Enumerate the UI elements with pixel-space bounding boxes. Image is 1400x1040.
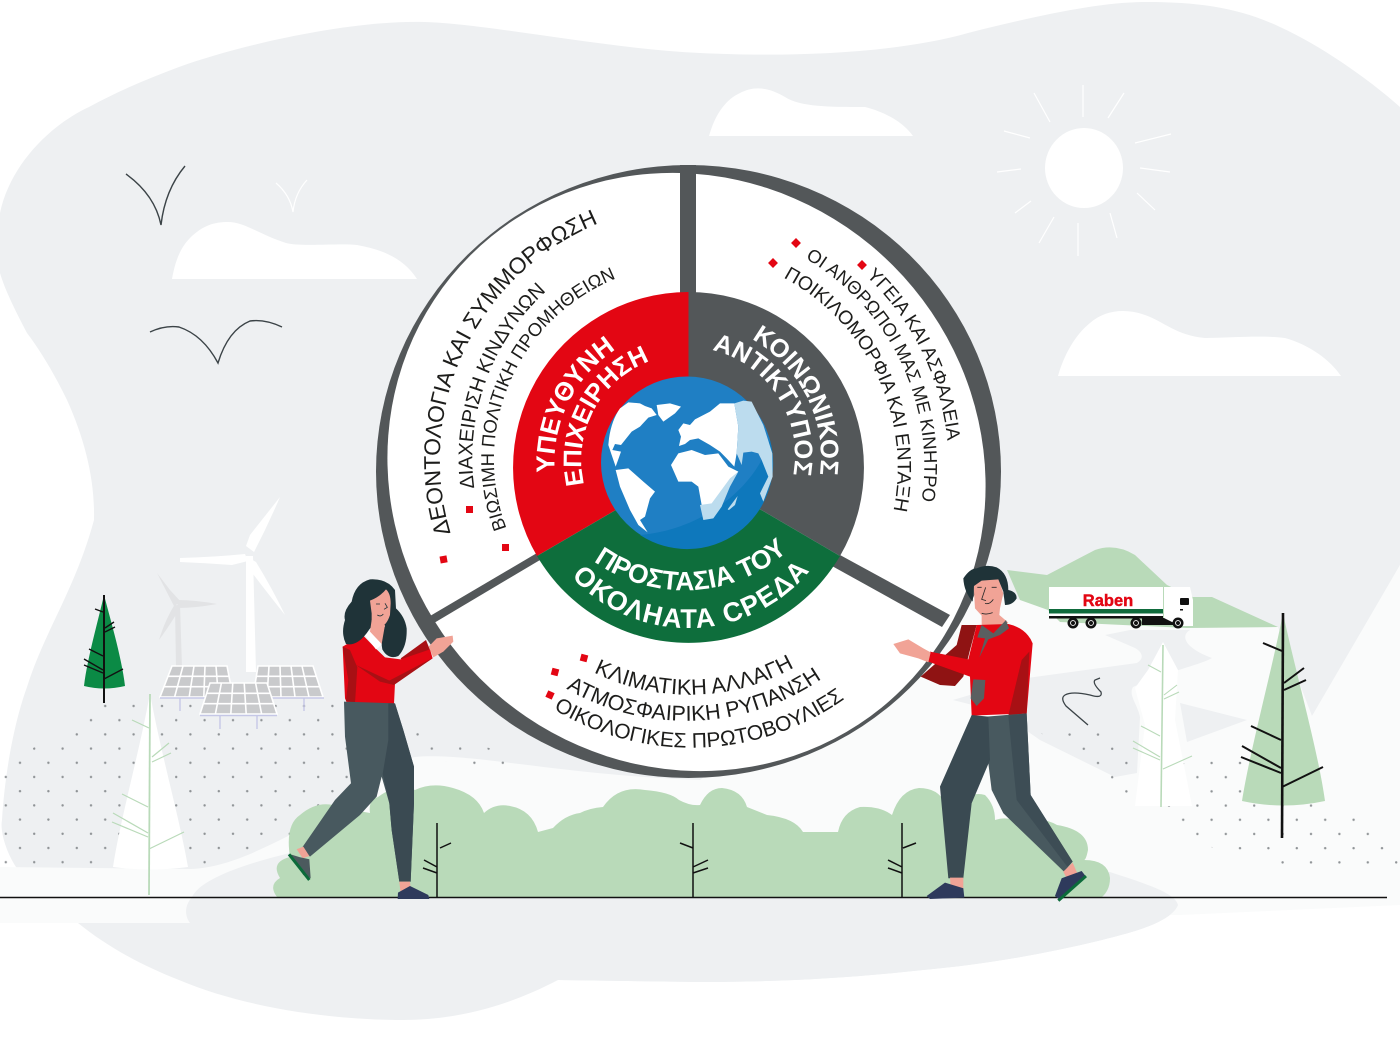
figure: man — [893, 566, 1086, 901]
globe — [601, 376, 773, 549]
panel: wheel — [376, 165, 1001, 778]
list: environment items: ΚΛΙΜΑΤΙΚΗ ΑΛΛΑΓΗ — [595, 654, 793, 695]
cloud: top centre — [709, 88, 913, 136]
heading: environment: ΠΡΟΣΤΑΣΙΑ ΤΟΥ — [595, 537, 782, 590]
wheel white face — [264, 49, 1109, 895]
man trousers shading — [1008, 713, 1073, 867]
land: south america — [616, 468, 655, 532]
cloud: left — [172, 222, 417, 279]
truck logo: Raben — [1083, 592, 1133, 610]
list: business items: ΒΙΩΣΙΜΗ ΠΟΛΙΤΙΚΗ ΠΡΟΜΗΘΕΙΩΝ — [481, 267, 615, 531]
dot texture right — [1035, 728, 1400, 870]
heading: social impact: ΑΝΤΙΚΤΥΠΟΣ — [712, 335, 812, 476]
man scarf — [977, 620, 1009, 657]
heading: responsible business: ΥΠΕΥΘΥΝΗ — [536, 336, 614, 472]
cloud: right — [1058, 311, 1341, 376]
list: business items: ΔΕΟΝΤΟΛΟΓΙΑ ΚΑΙ ΣΥΜΜΟΡΦΩΣΗ — [424, 210, 597, 534]
list: environment items — [545, 654, 844, 748]
icon: bird faint — [276, 180, 307, 212]
wind turbine small — [157, 573, 217, 668]
sector: environment — [537, 468, 840, 643]
man features — [977, 587, 997, 614]
bush tree right — [888, 823, 916, 897]
icon: bird one — [126, 166, 185, 225]
grey patch: right — [1180, 703, 1247, 742]
ground shadow — [186, 853, 1178, 982]
man trousers near leg — [987, 713, 1073, 872]
truck wheels — [1069, 619, 1182, 627]
list: environment items: ΟΙΚΟΛΟΓΙΚΕΣ ΠΡΩΤΟΒΟΥΛΙΕΣ — [556, 688, 844, 748]
man torso — [928, 624, 1033, 716]
land: eurasia — [678, 403, 738, 467]
woman hand — [429, 636, 453, 657]
list: social items: ΟΙ ΑΝΘΡΩΠΟΙ ΜΑΣ ΜΕ ΚΙΝΗΤΡΟ — [808, 250, 937, 502]
woman far arm — [401, 640, 431, 662]
man rear foot — [1063, 863, 1077, 878]
panel front — [200, 683, 277, 729]
squiggle — [1063, 678, 1101, 725]
grey patch: winding road — [953, 630, 1212, 777]
icon: bird three — [150, 321, 282, 363]
woman hair — [343, 579, 407, 657]
truck — [1049, 587, 1193, 627]
sector: social impact — [688, 292, 864, 556]
ground line — [0, 896, 1387, 898]
list: business items: ΔΙΑΧΕΙΡΙΣΗ ΚΙΝΔΥΝΩΝ — [458, 282, 545, 488]
man front foot — [950, 878, 963, 889]
land: north america — [608, 402, 657, 467]
man head — [973, 575, 1008, 634]
man hair — [963, 566, 1017, 605]
bushes — [273, 785, 1110, 897]
land: greenland — [657, 403, 681, 422]
wind turbine large — [180, 497, 285, 672]
man trousers back leg — [940, 715, 990, 878]
woman trousers shading — [383, 703, 414, 882]
woman trousers — [302, 702, 414, 882]
list: environment items: ΑΤΜΟΣΦΑΙΡΙΚΗ ΡΥΠΑΝΣΗ — [566, 667, 820, 721]
woman front foot — [399, 882, 411, 893]
man scarf tail — [971, 679, 985, 706]
list: social items — [768, 238, 960, 512]
panel back left — [160, 666, 233, 711]
solar panels — [160, 666, 324, 729]
tree: dark green — [84, 595, 125, 703]
woman face — [370, 589, 391, 626]
figure: woman — [289, 579, 453, 899]
spoke top — [680, 165, 696, 295]
dot texture left — [0, 698, 510, 869]
tree: big pale green — [1241, 613, 1325, 838]
woman neck — [370, 620, 385, 644]
tree: white left — [112, 693, 188, 895]
heading: social impact: ΚΟΙΝΩΝΙΚΟΣ — [753, 325, 838, 474]
sector: responsible business — [513, 292, 688, 556]
heading: environment: ΟΚΟΛΗΑΤΑ CΡΕΔΑ — [575, 564, 810, 628]
near-white road band — [0, 565, 1400, 923]
list: social items: ΥΓΕΙΑ ΚΑΙ ΑΣΦΑΛΕΙΑ — [870, 267, 960, 441]
land: africa — [671, 450, 738, 510]
bush tree left — [423, 823, 451, 897]
hills — [1007, 547, 1278, 628]
icon: sun — [997, 85, 1171, 256]
tree: pale behind road — [1133, 642, 1192, 807]
heading: responsible business: ΕΠΙΧΕΙΡΗΣΗ — [564, 346, 648, 486]
woman features — [376, 603, 387, 616]
woman rear foot — [297, 847, 309, 858]
man torso shading — [1008, 652, 1029, 716]
list: social items: ΠΟΙΚΙΛΟΜΟΡΦΙΑ ΚΑΙ ΕΝΤΑΞΗ — [784, 266, 912, 512]
land: eastern shaded — [734, 401, 773, 502]
wheel outer ring — [376, 165, 1001, 778]
woman torso — [343, 635, 433, 704]
spoke left — [430, 553, 540, 623]
bush tree centre — [680, 823, 708, 897]
woman shading — [343, 647, 432, 703]
woman collar — [363, 631, 383, 649]
man far arm — [921, 625, 977, 686]
panel back right — [253, 666, 324, 711]
spoke right — [832, 555, 950, 627]
man hand — [893, 639, 931, 662]
